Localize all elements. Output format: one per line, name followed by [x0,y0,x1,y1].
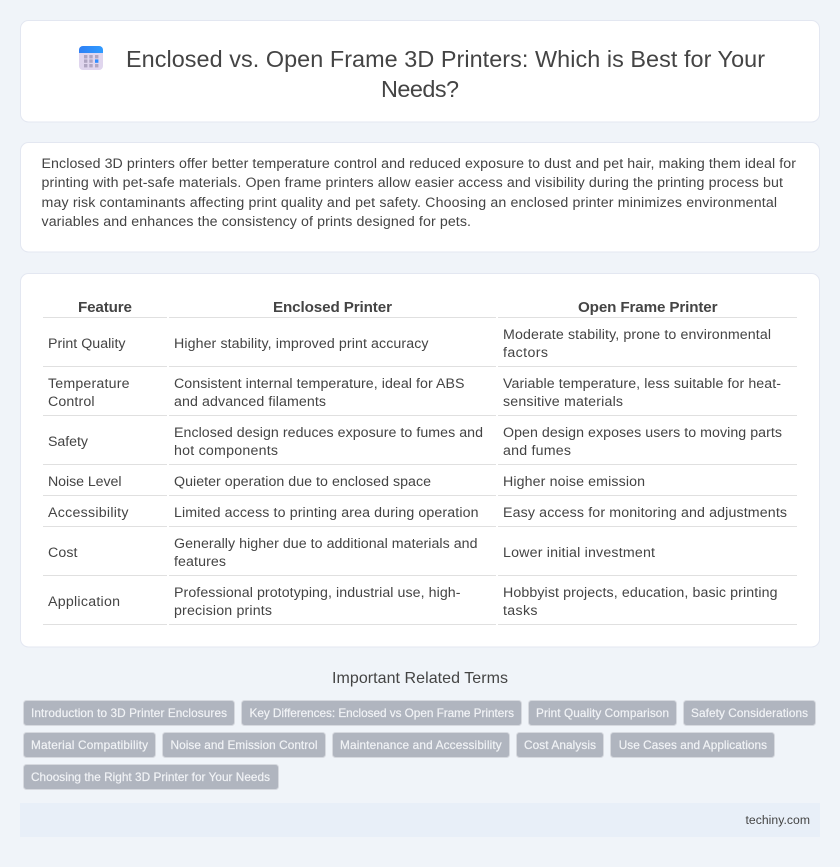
row: noise level [48,474,645,490]
row: print quality: Higher stability, improved print accuracy [174,336,429,352]
tag [684,700,816,726]
related term tags [24,700,816,790]
row: print quality [48,327,771,361]
panel: introduction text: printing with pet-safe materials. Open frame printers allow easier access and visibility during the printing process but [42,175,783,191]
row: application [48,585,778,619]
row: application: Application [48,594,120,610]
row: print quality: factors [503,345,548,361]
tag [162,732,326,758]
tag: Key Differences: Enclosed vs Open Frame Printers [250,706,514,720]
tag: Print Quality Comparison [536,706,669,720]
tag: Choosing the Right 3D Printer for Your Needs [31,770,270,784]
row: temperature control: sensitive materials [503,394,623,410]
row: accessibility: Limited access to printing area during operation [174,505,478,521]
tag: Introduction to 3D Printer Enclosures [31,706,227,720]
tag [24,764,278,790]
row: temperature control: Consistent internal temperature, ideal for ABS [174,376,464,392]
row: cost: Lower initial investment [503,545,655,561]
table header: Enclosed Printer [273,299,392,316]
title [126,46,765,102]
row: noise level: Noise Level [48,474,122,490]
row: safety: Open design exposes users to moving parts [503,425,782,441]
row: temperature control: Variable temperature, less suitable for heat- [503,376,781,392]
row: accessibility: Easy access for monitoring and adjustments [503,505,787,521]
panel: introduction text: Enclosed 3D printers offer better temperature control and reduced exposure to dust and pet hair, making them ideal for [42,156,796,172]
row: application: tasks [503,603,538,619]
row: accessibility [48,505,787,521]
table header: Feature [78,299,132,316]
row: safety: hot components [174,443,278,459]
row: cost [48,536,655,570]
row: safety [48,425,782,459]
row: safety: Safety [48,434,89,450]
row: cost: features [174,554,226,570]
row: temperature control: and advanced filaments [174,394,326,410]
row: application: precision prints [174,603,272,619]
tag: Material Compatibility [31,738,148,752]
row: cost: Generally higher due to additional materials and [174,536,478,552]
row: application: Professional prototyping, industrial use, high- [174,585,461,601]
row: temperature control [48,376,781,410]
row: print quality: Print Quality [48,336,126,352]
tag: Noise and Emission Control [170,738,318,752]
tag [24,732,156,758]
tag [24,700,234,726]
row: print quality: Moderate stability, prone to environmental [503,327,771,343]
tag [610,732,774,758]
panel: comparison table [20,274,820,647]
tag [516,732,604,758]
title: Needs? [381,76,459,102]
tag: Safety Considerations [691,706,808,720]
tag: Cost Analysis [524,738,596,752]
tag: Maintenance and Accessibility [340,738,502,752]
table header: Open Frame Printer [578,299,718,316]
panel: introduction text: variables and enhances the consistency of prints designed for pets. [42,214,471,230]
panel: introduction text: may risk contaminants affecting print quality and pet safety. Choosing an enclosed printer minimizes environmental [42,195,777,211]
tag [332,732,510,758]
tag [242,700,522,726]
tag: Use Cases and Applications [619,738,767,752]
row: application: Hobbyist projects, education, basic printing [503,585,778,601]
row: noise level: Quieter operation due to enclosed space [174,474,431,490]
title: Enclosed vs. Open Frame 3D Printers: Which is Best for Your [126,46,765,72]
row: temperature control: Control [48,394,94,410]
heading: important related terms: Important Related Terms [332,670,508,687]
footer [20,803,820,837]
footer: techiny.com [746,813,810,827]
row: accessibility: Accessibility [48,505,129,521]
panel: title card [20,20,820,122]
tag [528,700,676,726]
row: noise level: Higher noise emission [503,474,645,490]
row: temperature control: Temperature [48,376,130,392]
row: cost: Cost [48,545,78,561]
panel: introduction text [20,142,820,252]
icon: calendar [79,46,103,70]
row: safety: and fumes [503,443,571,459]
table header [78,299,718,316]
row: safety: Enclosed design reduces exposure to fumes and [174,425,483,441]
